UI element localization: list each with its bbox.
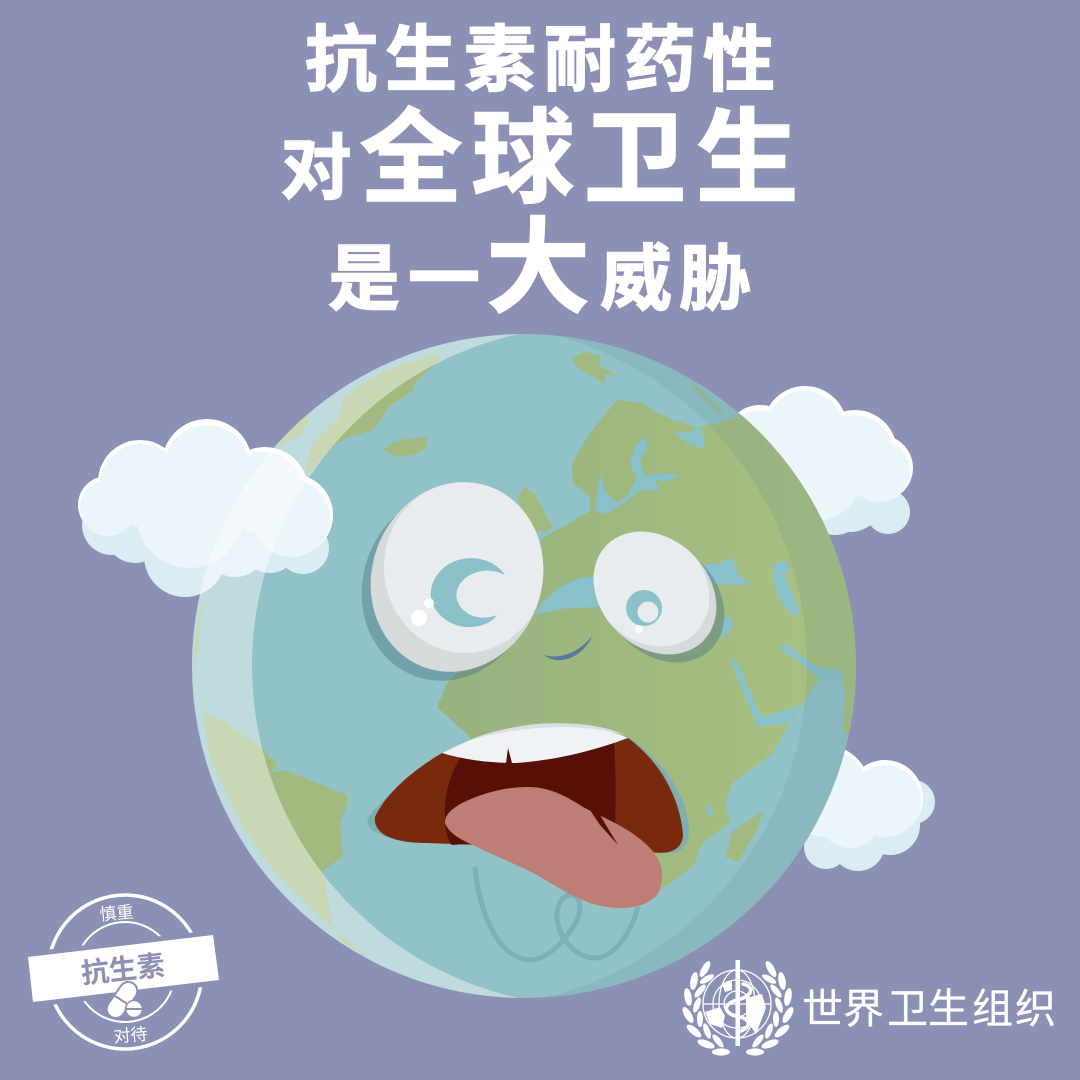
land: Americas — [203, 713, 367, 957]
land: Greenland — [305, 353, 440, 473]
drool — [475, 867, 638, 960]
tongue crease — [586, 804, 618, 845]
cloud: left front — [78, 419, 333, 597]
lake — [706, 805, 713, 817]
sea: Baltic — [595, 437, 680, 515]
earth — [192, 334, 856, 998]
right eye shadow — [577, 515, 749, 687]
title line 2 large: 全球卫生 — [360, 101, 798, 216]
sea: Caspian — [773, 560, 800, 616]
land: Britain — [517, 487, 553, 532]
badge outer ring — [48, 895, 202, 1049]
title line 2 small: 对 — [280, 130, 352, 209]
sea: Persian Gulf — [776, 645, 842, 680]
title line 3 large: 大 — [486, 211, 590, 327]
emblem rod — [736, 960, 740, 1046]
emblem land — [705, 980, 766, 1034]
sea: Red Sea — [730, 657, 800, 727]
emblem laurel — [680, 960, 796, 1056]
left eyeball — [344, 458, 570, 696]
WHO logo — [680, 960, 1056, 1056]
land: South America limb sliver — [193, 597, 203, 670]
tongue — [445, 787, 662, 908]
left eye highlight — [384, 481, 546, 653]
land: Svalbard — [572, 352, 616, 384]
sea: near eye — [722, 617, 733, 640]
emblem globe — [703, 970, 771, 1038]
seas — [533, 426, 842, 817]
sea: White Sea — [673, 426, 705, 448]
sea: Mediterranean — [533, 576, 600, 615]
left eye glints — [411, 598, 434, 626]
tooth line — [506, 748, 512, 763]
right eye — [594, 532, 724, 662]
badge bottom text: 对待 — [113, 1025, 148, 1046]
mouth cavity — [375, 723, 683, 853]
WHO emblem — [680, 960, 796, 1056]
land: Iceland — [383, 437, 428, 457]
land: Madagascar — [725, 812, 763, 862]
ocean — [192, 334, 856, 998]
land: Eurasia and Africa — [437, 400, 880, 890]
land masses — [193, 352, 880, 957]
cloud: lower right back — [780, 745, 935, 871]
emblem snake — [726, 984, 751, 1032]
sea: Black Sea — [703, 558, 752, 585]
badge banner — [28, 935, 219, 1002]
teeth edge — [470, 723, 625, 740]
left pupil — [431, 558, 505, 627]
right shaded band — [550, 336, 856, 996]
land: North America sliver — [275, 412, 310, 450]
nose — [544, 636, 592, 660]
left light crescent — [192, 334, 518, 998]
title — [280, 21, 798, 327]
mouth — [368, 723, 689, 908]
badge pills — [103, 978, 142, 1022]
teeth — [442, 723, 628, 763]
mouth throat — [445, 730, 616, 845]
right eye highlight — [594, 532, 710, 646]
land: Greenland islet — [407, 387, 415, 394]
mouth shadow — [368, 738, 689, 853]
land: Arctic islands — [688, 380, 728, 420]
cloud: right back — [725, 386, 913, 537]
badge top text: 慎重 — [99, 903, 134, 924]
title line 1: 抗生素耐药性 — [305, 21, 775, 101]
badge inner ring — [75, 922, 175, 1022]
badge: handle antibiotics with care — [28, 895, 219, 1049]
title line 3 left: 是一 — [328, 240, 480, 320]
right eyeball — [569, 507, 741, 679]
right eye glint — [635, 625, 643, 633]
left eye — [362, 482, 544, 681]
title line 3 right: 威胁 — [600, 240, 751, 320]
left eye shadow — [335, 467, 561, 705]
right pupil centre — [638, 602, 658, 622]
right pupil — [626, 590, 662, 626]
badge banner text: 抗生素 — [80, 950, 166, 989]
WHO name: 世界卫生组织 — [802, 986, 1056, 1032]
